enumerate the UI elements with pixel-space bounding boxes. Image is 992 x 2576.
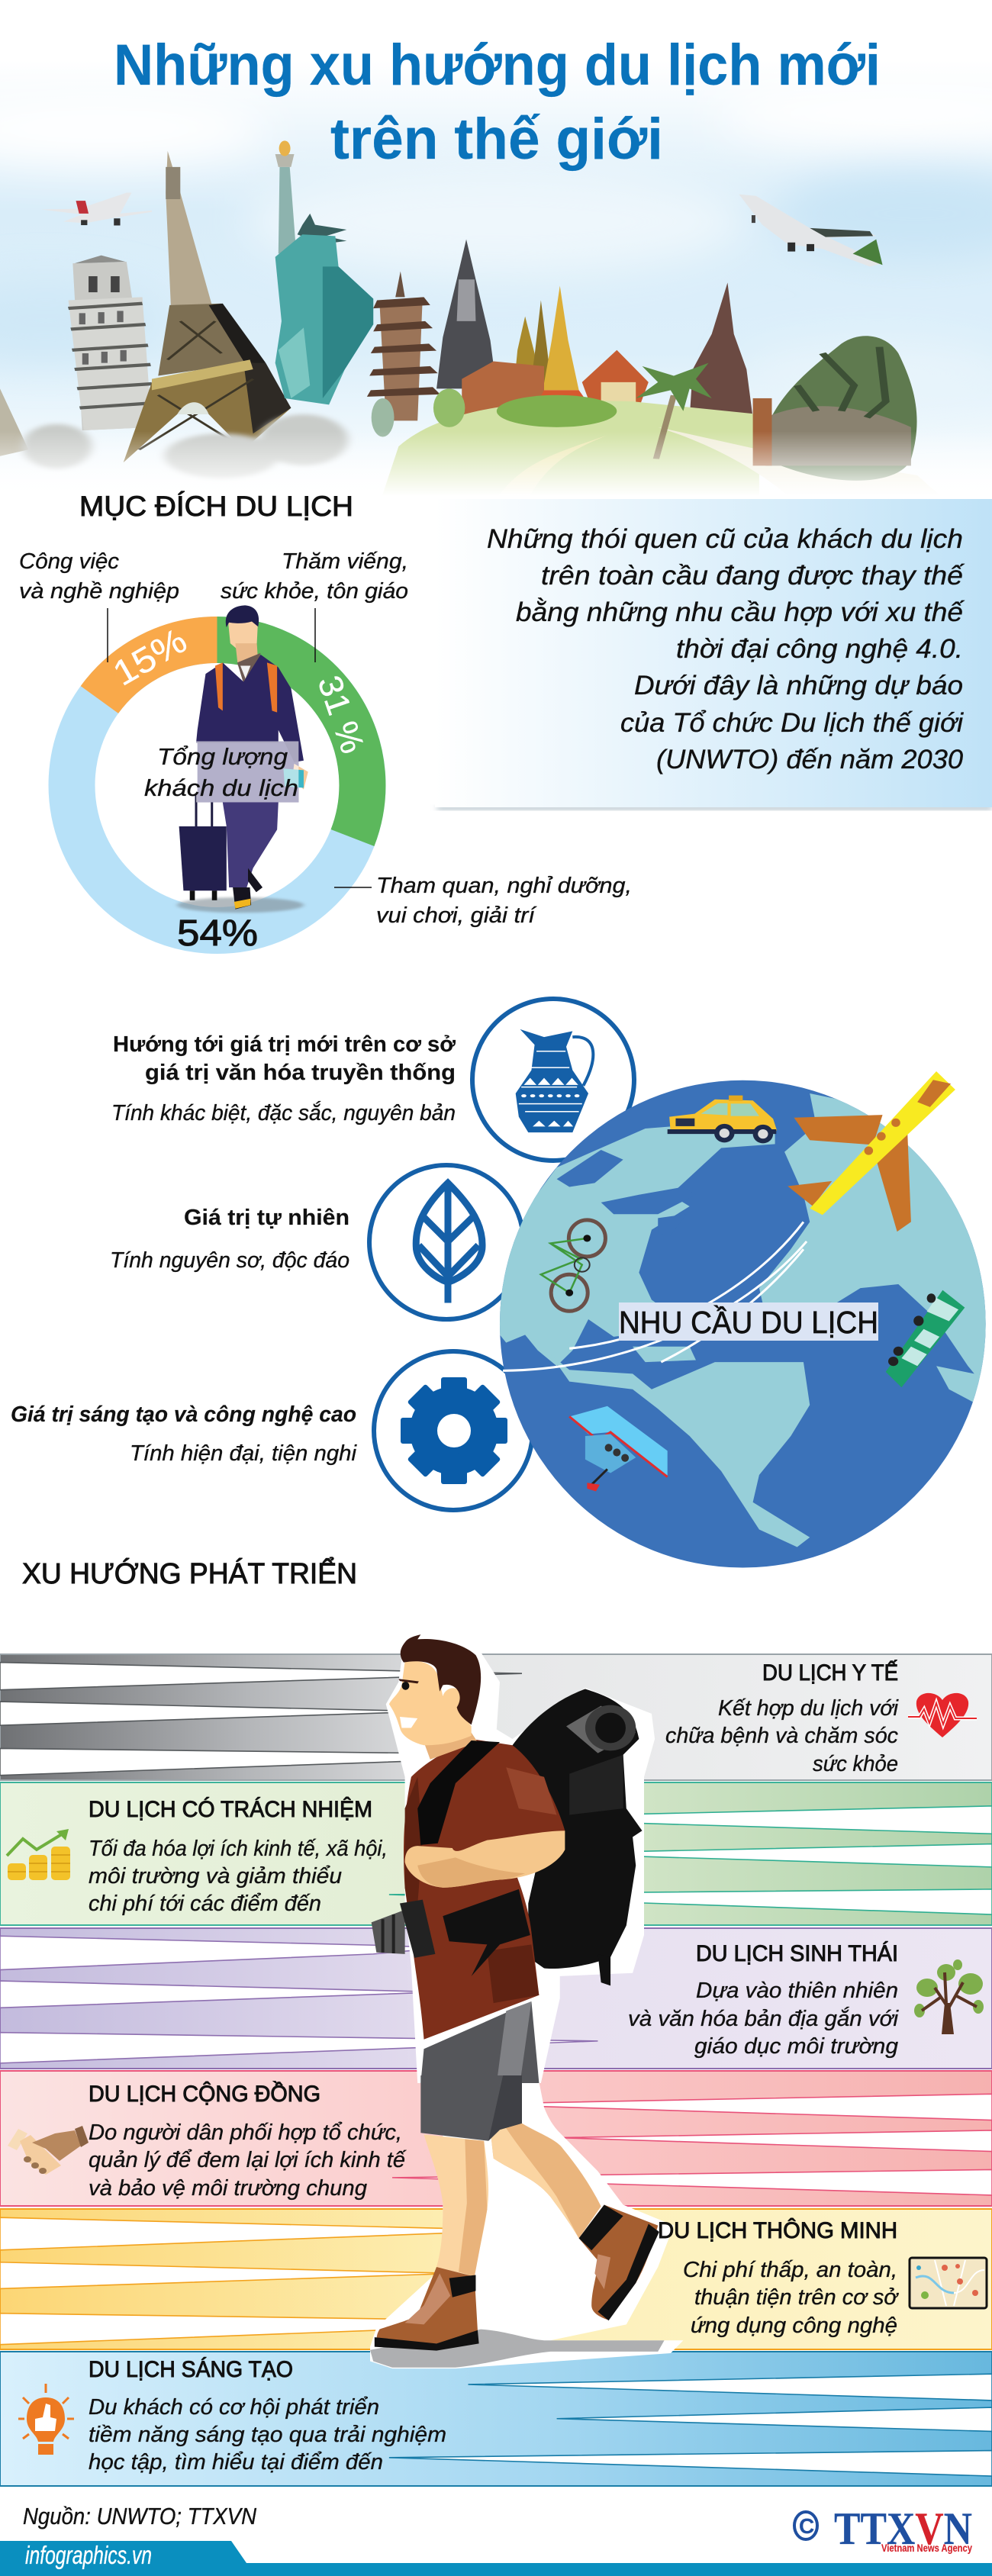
label: 15%: 15% [106, 620, 193, 694]
text: creative tourism: tiềm năng sáng tạo qua trải nghiệm [89, 2423, 446, 2447]
icon: light bulb with thumb [18, 2384, 74, 2455]
text: creative values [11, 1402, 358, 1466]
panel: intro text [435, 499, 992, 810]
title [114, 33, 881, 172]
camera [372, 1910, 405, 1954]
text: smart tourism: ứng dụng công nghệ [691, 2314, 897, 2338]
text: community tourism: và bảo vệ môi trường chung [89, 2176, 367, 2201]
palm tree [636, 363, 712, 459]
backpacker figure [370, 1634, 683, 2368]
label: business: Công việc [19, 549, 119, 574]
text: creative values: Tính hiện đại, tiện nghi [130, 1441, 358, 1466]
label: visiting: sức khỏe, tôn giáo [221, 579, 408, 604]
strap [417, 1740, 500, 1845]
Tower of Pisa [69, 256, 152, 430]
circle: creativity and technology [374, 1351, 533, 1510]
band: creative tourism [0, 2352, 992, 2486]
title: trên thế giới [330, 107, 663, 172]
neck and head [424, 1728, 478, 1760]
icon: ship [569, 1406, 668, 1491]
pagoda [367, 272, 440, 420]
text: smart tourism [658, 2217, 899, 2338]
panel: intro text: bằng những nhu cầu hợp với xu thế [516, 597, 965, 627]
text: culture values [111, 1032, 456, 1125]
text: creative values: Giá trị sáng tạo và công nghệ cao [11, 1402, 356, 1427]
text: creative tourism [89, 2357, 446, 2475]
heading: travel purpose: MỤC ĐÍCH DU LỊCH [79, 491, 353, 522]
band: responsible tourism [0, 1782, 992, 1925]
panel: intro text: Những thói quen cũ của khách du lịch [487, 524, 963, 554]
Big Ben [0, 388, 28, 456]
golden stupas [514, 286, 579, 390]
text: medical tourism [665, 1660, 900, 1776]
icon: heart with pulse [908, 1693, 977, 1737]
icon: growth coins [7, 1829, 70, 1880]
flight lines [503, 1222, 807, 1370]
text: natural values [110, 1206, 349, 1273]
icon: airplane [787, 1071, 955, 1232]
label: leisure: vui chơi, giải trí [376, 903, 537, 928]
text: creative tourism: DU LỊCH SÁNG TẠO [89, 2357, 293, 2382]
text: community tourism: Do người dân phối hợp tổ chức, [89, 2120, 402, 2145]
text: natural values: Giá trị tự nhiên [184, 1206, 349, 1230]
icon: taxi [668, 1096, 777, 1143]
text: smart tourism: Chi phí thấp, an toàn, [683, 2258, 897, 2282]
text: culture values: Hướng tới giá trị mới trên cơ sở [113, 1032, 456, 1057]
green land and beach [372, 388, 949, 504]
figure: upper body [372, 1634, 655, 2083]
text: culture values: giá trị văn hóa truyền thống [145, 1061, 456, 1085]
panel: intro text: Dưới đây là những dự báo [634, 671, 963, 700]
segment: 31% [217, 639, 362, 838]
logo: TTXVN: TTXVN [834, 2504, 972, 2554]
band: smart tourism [0, 2209, 992, 2349]
backpack [513, 1689, 643, 1985]
text: eco tourism: Dựa vào thiên nhiên [696, 1979, 898, 2003]
text: smart tourism: DU LỊCH THÔNG MINH [658, 2217, 897, 2243]
text: medical tourism: Kết hợp du lịch với [718, 1696, 900, 1721]
Eiffel Tower [124, 151, 291, 462]
text: community tourism: quản lý để đem lại lợi ích kinh tế [89, 2148, 407, 2172]
panel: intro text: (UNWTO) đến năm 2030 [656, 745, 964, 774]
label: leisure [334, 874, 632, 928]
text: responsible tourism: môi trường và giảm thiểu [89, 1864, 342, 1889]
footer bar [0, 2541, 992, 2576]
title: Những xu hướng du lịch mới [114, 33, 881, 98]
circle: nature [369, 1165, 523, 1319]
limestone rock [753, 336, 917, 481]
label: total travellers: Tổng lượng [157, 743, 288, 770]
label: visiting: Thăm viếng, [282, 549, 408, 574]
icon: jug [516, 1029, 593, 1132]
donut percent labels on ring [106, 620, 372, 758]
land masses [494, 1093, 992, 1547]
source note: Nguồn: UNWTO; TTXVN [23, 2503, 257, 2529]
snowy trees [22, 414, 348, 478]
text: medical tourism: DU LỊCH Y TẾ [762, 1660, 898, 1686]
segment: 15% [99, 639, 217, 700]
label: leisure: Tham quan, nghỉ dưỡng, [376, 874, 632, 898]
icon: handshake [8, 2126, 89, 2175]
donut labels [19, 549, 632, 928]
footer bar: infographics.vn [25, 2541, 152, 2569]
label: total travellers: khách du lịch [144, 774, 298, 801]
text: eco tourism [628, 1941, 900, 2059]
text: responsible tourism: chi phí tới các điểm đến [89, 1892, 321, 1916]
text: responsible tourism: DU LỊCH CÓ TRÁCH NHIỆM [89, 1797, 372, 1822]
icon: leaf [416, 1183, 482, 1303]
segment: 54% [72, 639, 362, 931]
text: responsible tourism: Tối đa hóa lợi ích kinh tế, xã hội, [89, 1837, 388, 1861]
text: responsible tourism [89, 1797, 388, 1916]
right plane [739, 195, 883, 266]
arm [405, 1831, 565, 1888]
label: total travellers [144, 743, 298, 801]
text: creative tourism: Du khách có cơ hội phát triển [89, 2395, 379, 2420]
icon: gear [401, 1377, 507, 1484]
text: community tourism: DU LỊCH CỘNG ĐỒNG [89, 2081, 320, 2107]
text: smart tourism: thuận tiện trên cơ sở [694, 2285, 899, 2310]
hero illustration: sky and world landmarks [0, 0, 992, 504]
Thai temple [462, 350, 649, 424]
label: 31%: 31 % [311, 671, 372, 758]
brown spire temple [690, 282, 753, 417]
donut chart: travel purpose [72, 639, 362, 954]
shirt [404, 1739, 565, 2040]
left plane [41, 193, 152, 225]
dark temple tower [436, 240, 497, 388]
text: eco tourism: DU LỊCH SINH THÁI [696, 1941, 898, 1966]
figure: legs and boots [370, 2075, 683, 2368]
label: business [19, 549, 179, 662]
label: 54%: 54% [177, 913, 258, 954]
band: eco tourism [0, 1928, 992, 2069]
text: creative tourism: học tập, tìm hiểu tại điểm đến [89, 2450, 383, 2475]
text: natural values: Tính nguyên sơ, độc đáo [110, 1248, 349, 1273]
text: eco tourism: và văn hóa bản địa gắn với [628, 2006, 900, 2031]
icon: bus [886, 1290, 965, 1387]
globe label: NHU CẦU DU LỊCH [619, 1305, 878, 1340]
logo: TTXVN: C [799, 2514, 814, 2538]
Statue of Liberty [275, 140, 373, 404]
text: eco tourism: giáo dục môi trường [694, 2034, 898, 2059]
logo: TTXVN: Vietnam News Agency [881, 2542, 972, 2554]
icon: map tablet [910, 2258, 987, 2308]
text: culture values: Tính khác biệt, đặc sắc, nguyên bản [111, 1100, 456, 1125]
figure: shorts lower [420, 2075, 522, 2141]
icon: tree [914, 1959, 984, 2034]
label: business: và nghề nghiệp [19, 579, 179, 604]
text: medical tourism: chữa bệnh và chăm sóc [665, 1724, 898, 1748]
globe illustration [494, 1071, 992, 1567]
traveller with suitcase [177, 605, 308, 913]
text: medical tourism: sức khỏe [813, 1752, 898, 1776]
band: medical tourism [0, 1654, 992, 1780]
icon: bicycle [541, 1220, 605, 1311]
text: community tourism [89, 2081, 407, 2201]
circle: traditional culture [472, 999, 634, 1161]
band: community tourism [0, 2071, 992, 2206]
heading: development trends: XU HƯỚNG PHÁT TRIỂN [22, 1556, 357, 1590]
label: visiting [221, 549, 408, 662]
waist belt [443, 1889, 530, 1976]
panel: intro text: thời đại công nghệ 4.0. [676, 634, 963, 664]
shorts [420, 2001, 539, 2083]
panel: intro text: của Tổ chức Du lịch thế giới [620, 708, 964, 738]
panel: intro text: trên toàn cầu đang được thay thế [541, 561, 965, 591]
